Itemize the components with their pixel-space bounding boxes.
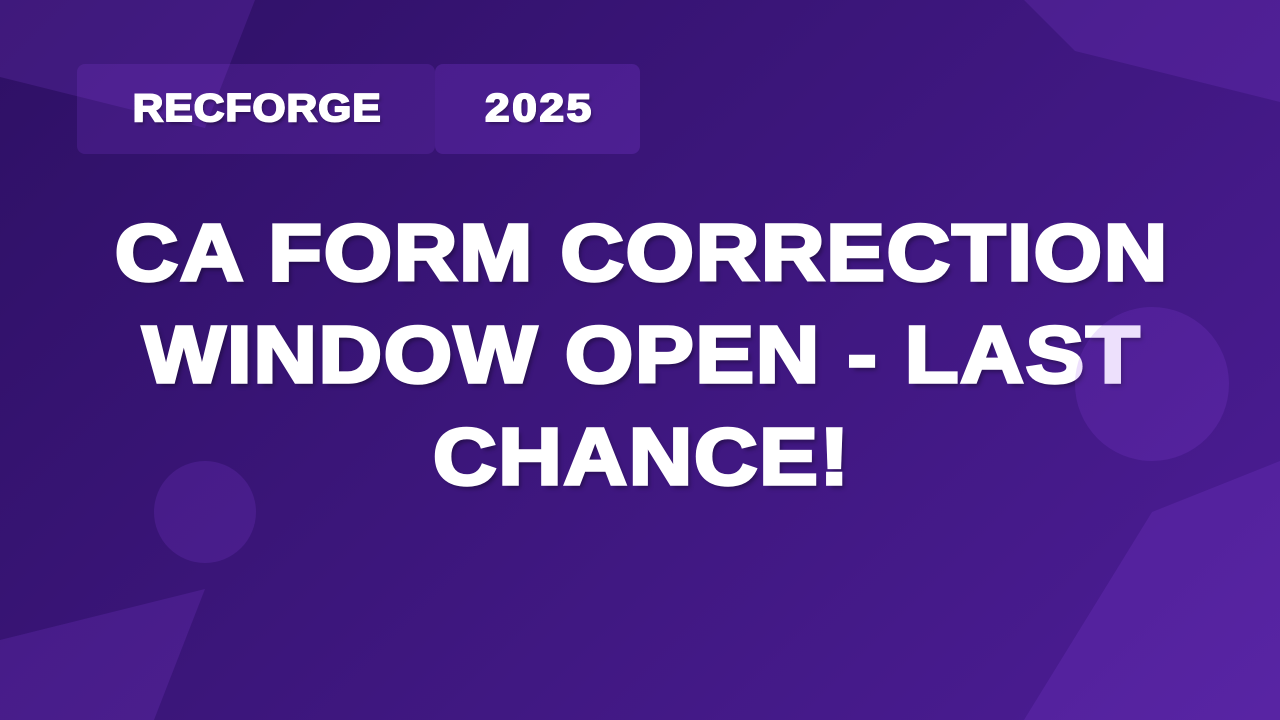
badge: year: 2025 <box>485 87 594 130</box>
title: WINDOW OPEN - LAST <box>142 310 1141 399</box>
title: CHANCE! <box>433 412 850 501</box>
shape: bottom right polygon <box>1024 461 1280 720</box>
title: CA FORM CORRECTION <box>114 208 1169 297</box>
shape: small circle <box>154 461 256 563</box>
badge: year <box>435 64 640 154</box>
shape: top right polygon <box>1024 0 1280 102</box>
badge: brand <box>77 64 435 154</box>
shape: top left polygon <box>0 0 255 128</box>
title <box>114 208 1169 501</box>
badge: brand: RECFORGE <box>132 87 382 130</box>
shape: bottom left polygon <box>0 589 205 720</box>
